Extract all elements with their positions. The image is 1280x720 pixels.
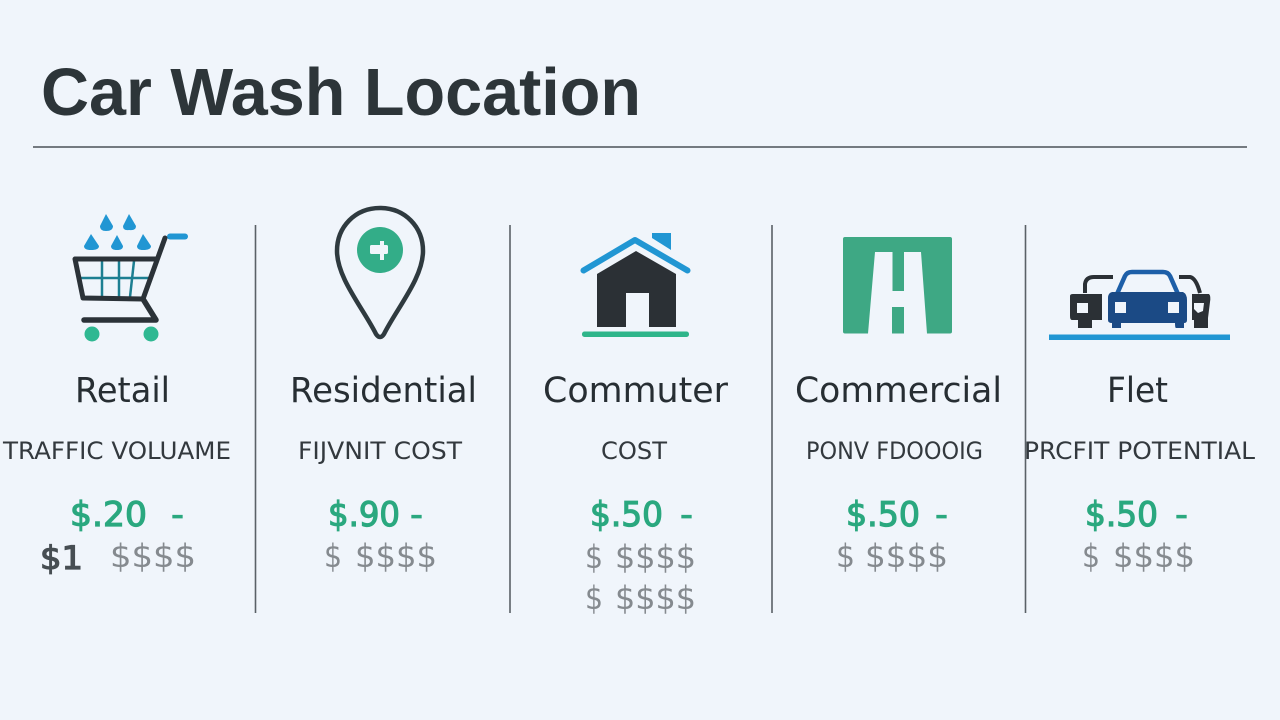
- dollar single: $: [1082, 537, 1100, 575]
- dollar rating: $$$$: [1113, 537, 1195, 575]
- dollar rating: $$$$: [110, 537, 196, 575]
- dollar rating: $$$$: [865, 537, 948, 575]
- metric label: PRCFIT POTENTIAL: [1024, 437, 1256, 465]
- title: Car Wash Location: [41, 55, 641, 130]
- dollar single second row: $: [585, 579, 603, 617]
- icon: house: [582, 233, 689, 337]
- price dash: -: [410, 495, 423, 535]
- heading: Commuter: Commuter: [543, 371, 729, 411]
- price dash: -: [1175, 495, 1188, 535]
- metric label: COST: [601, 437, 667, 465]
- icon: fleet of cars: [1049, 272, 1230, 340]
- metric label: TRAFFIC VOLUAME: [2, 437, 231, 465]
- heading: Retail: Retail: [75, 371, 170, 411]
- heading: Residential: Residential: [290, 371, 477, 411]
- dollar rating second row: $$$$: [615, 579, 696, 617]
- heading: Commercial: Commercial: [795, 371, 1002, 411]
- icon: shopping cart with water drops: [75, 214, 185, 342]
- price value: $.50: [590, 495, 663, 535]
- panel: fleet: [1024, 272, 1256, 575]
- metric label: PONV FDOOOIG: [806, 437, 983, 465]
- panel: commuter: [543, 233, 729, 617]
- dollar rating: $$$$: [355, 537, 437, 575]
- icon: highway road: [843, 237, 952, 334]
- price value: $.50: [846, 495, 920, 535]
- panel: commercial: [795, 237, 1002, 575]
- panel: retail: [2, 214, 231, 577]
- price value: $.20: [70, 495, 147, 535]
- dollar single: $: [324, 537, 342, 575]
- price start: $1: [40, 539, 83, 577]
- price value: $.90: [328, 495, 400, 535]
- price value: $.50: [1085, 495, 1158, 535]
- dollar single: $: [585, 538, 603, 576]
- heading: Flet: Flet: [1107, 371, 1168, 411]
- price dash: -: [935, 495, 948, 535]
- metric label: FIJVNIT COST: [298, 437, 462, 465]
- dollar rating: $$$$: [615, 538, 696, 576]
- dollar single: $: [836, 537, 855, 575]
- price dash: -: [171, 495, 184, 535]
- panel: residential: [290, 208, 477, 575]
- price dash: -: [680, 495, 693, 535]
- icon: location pin: [337, 208, 423, 337]
